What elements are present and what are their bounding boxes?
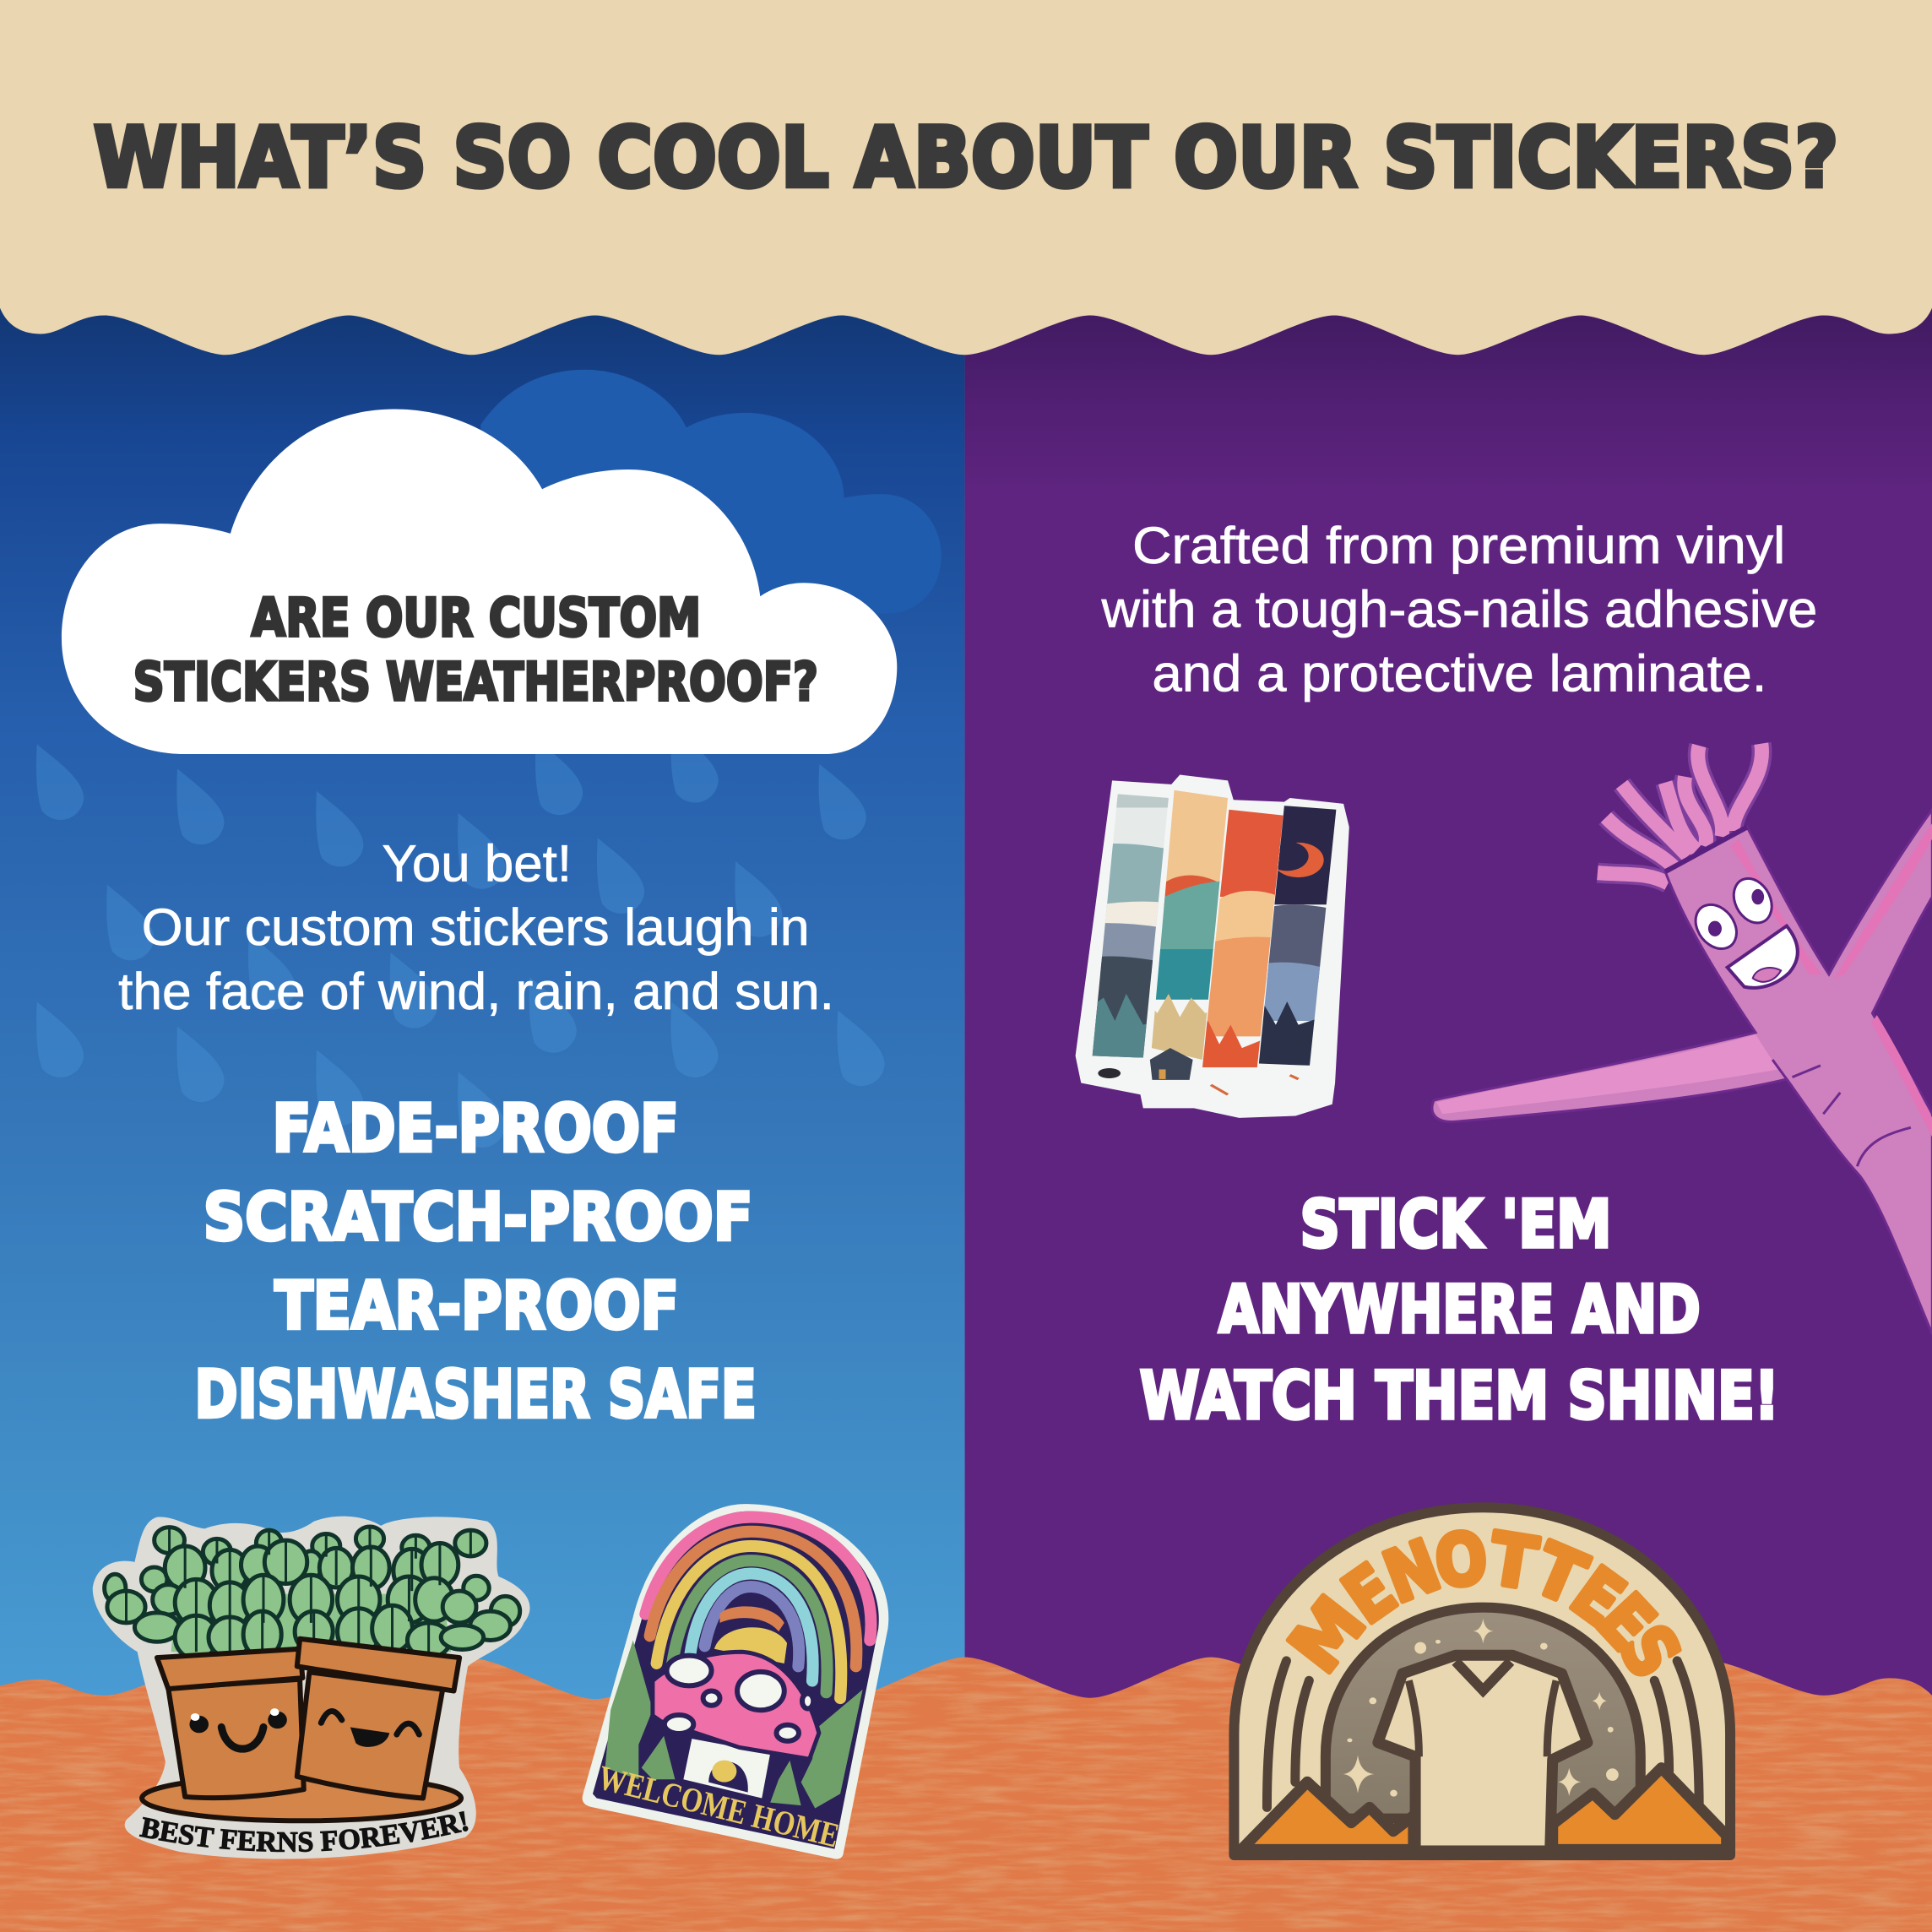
brand name on arc: O — [1431, 1516, 1491, 1604]
body highlights — [1436, 1034, 1778, 1114]
t-shirt — [1378, 1655, 1587, 1851]
right pot — [297, 1639, 459, 1799]
background dark cloud — [480, 370, 942, 616]
raindrops pattern — [36, 727, 885, 1148]
brand name on arc: S — [1603, 1611, 1696, 1692]
night sky arch — [1326, 1608, 1641, 1819]
stars and dots — [1343, 1619, 1619, 1797]
brand name on arc: M — [1273, 1582, 1381, 1688]
body text: you bet: Our custom stickers laugh in — [142, 898, 810, 956]
face — [1689, 876, 1798, 988]
rainbow bands — [645, 1517, 871, 1698]
cloud heading: ARE OUR CUSTOM — [252, 587, 701, 649]
body text: crafted: Crafted from premium vinyl — [1132, 517, 1785, 574]
headline: stick em: WATCH THEM SHINE! — [1140, 1359, 1779, 1435]
brand name on arc: T — [1522, 1528, 1597, 1622]
panel: beige header with wavy edge — [0, 0, 1932, 355]
wrinkle lines — [1772, 1060, 1911, 1166]
brand name on arc: E — [1582, 1578, 1671, 1666]
brand name on arc: T — [1484, 1517, 1543, 1607]
proof list: FADE-PROOF — [272, 1091, 679, 1167]
mushroom cap — [653, 1652, 819, 1759]
body text: you bet: You bet! — [382, 834, 572, 892]
body text: you bet: the face of wind, rain, and sun. — [118, 963, 834, 1020]
sticker: mountain strips — [1076, 774, 1349, 1118]
sticker: welcome home mushroom — [583, 1504, 888, 1859]
trees — [605, 1640, 653, 1779]
sun — [719, 1606, 784, 1631]
sticker backing — [93, 1517, 530, 1859]
body text: crafted: and a protective laminate. — [1152, 645, 1766, 703]
mushroom stem — [683, 1739, 770, 1799]
panel: purple column — [965, 296, 1932, 1712]
ferns caption: BEST FERNS FOREVER! — [138, 1810, 468, 1853]
white speech cloud — [62, 409, 897, 754]
sticker: best ferns forever — [93, 1517, 530, 1859]
headline: stick em: STICK 'EM — [1300, 1187, 1612, 1263]
proof list: TEAR-PROOF — [274, 1268, 679, 1344]
brand name on arc: E — [1328, 1548, 1411, 1640]
headline: stick em: ANYWHERE AND — [1218, 1272, 1701, 1348]
hair tendrils — [1598, 744, 1762, 883]
arch lines — [1267, 1661, 1699, 1810]
mountains — [1241, 1768, 1727, 1849]
fern leaves — [105, 1527, 520, 1659]
sticker: menotees badge — [1234, 1507, 1730, 1855]
body text: crafted: with a tough-as-nails adhesive — [1100, 581, 1817, 638]
brand name on arc: N — [1373, 1523, 1451, 1620]
welcome caption: WELCOME HOME — [594, 1758, 843, 1855]
pot faces — [189, 1708, 419, 1749]
proof list: DISHWASHER SAFE — [195, 1357, 757, 1433]
proof list: SCRATCH-PROOF — [204, 1180, 753, 1256]
ground: orange wood band — [0, 1658, 1932, 1932]
brand name on arc: E — [1556, 1550, 1639, 1642]
character: inflatable tube man — [1432, 744, 1932, 1334]
cloud heading: STICKERS WEATHERPROOF? — [133, 651, 818, 713]
brand name on arc — [1273, 1516, 1696, 1692]
panel: blue weatherproof column — [0, 296, 965, 1712]
left pot — [157, 1649, 304, 1798]
saucer — [142, 1776, 461, 1821]
cabin and bear — [1098, 1048, 1299, 1094]
